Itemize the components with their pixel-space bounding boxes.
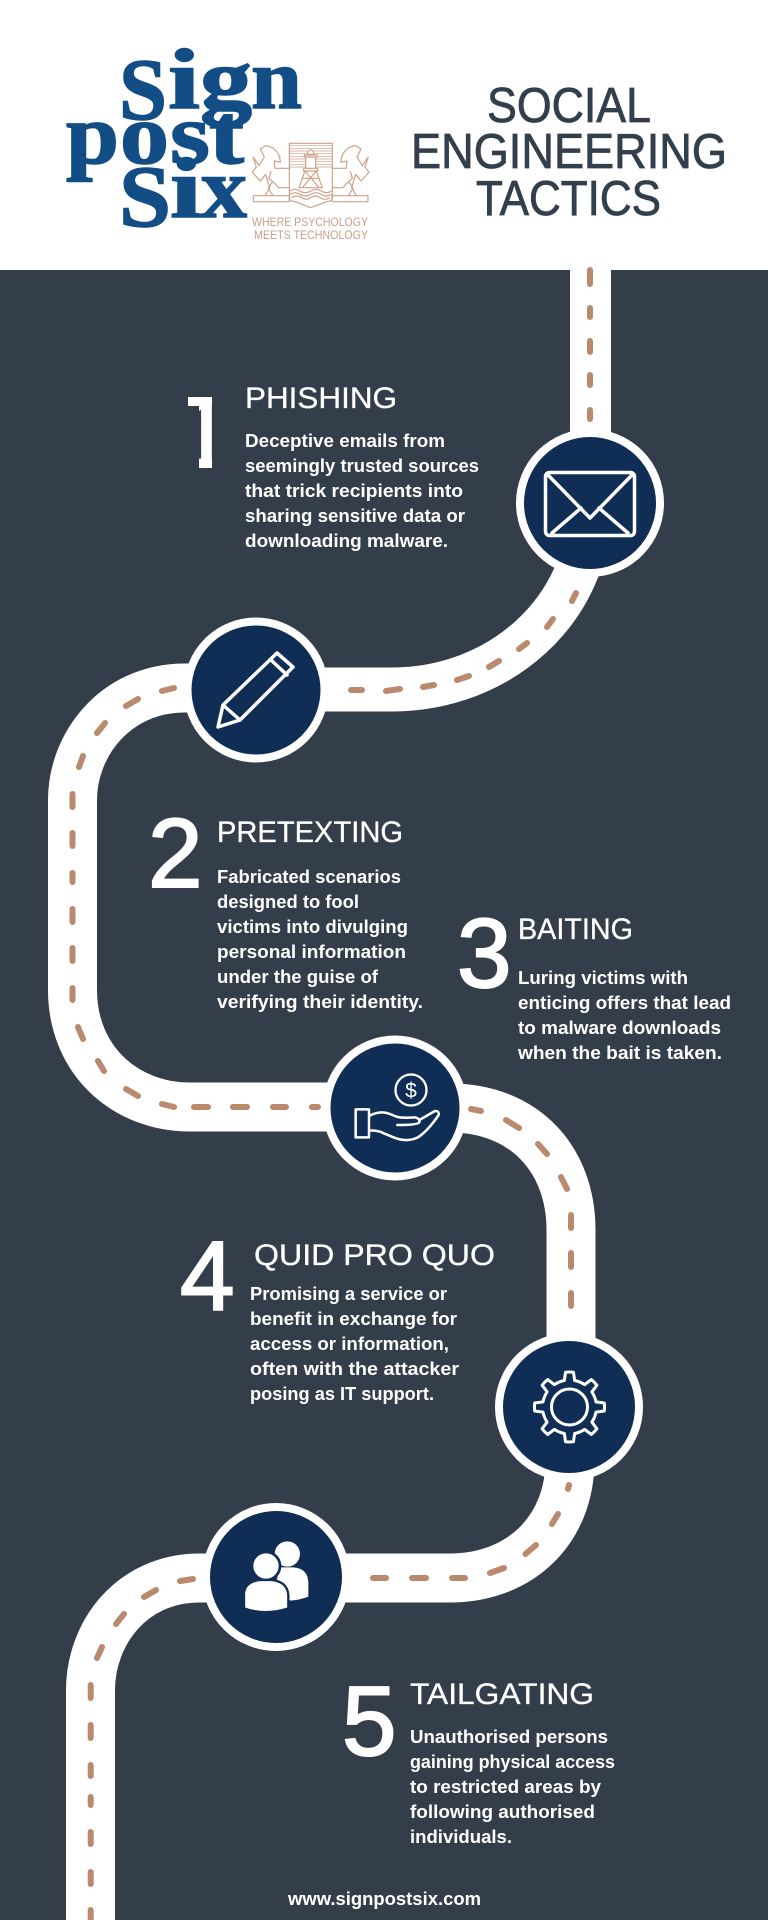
- body: pretexting: victims into divulging: [217, 916, 408, 937]
- step 4: quid pro quo: [180, 1221, 495, 1404]
- logo word Six: i: [170, 140, 202, 236]
- logo tagline: [252, 215, 368, 242]
- logo word Sign: g: [200, 31, 252, 127]
- number 1: 1: [178, 378, 232, 488]
- title: SOCIAL: [487, 79, 651, 133]
- logo word Sign: [119, 31, 302, 139]
- number 1: [188, 397, 212, 468]
- heading: pretexting: PRETEXTING: [217, 816, 403, 849]
- logo word Sign: i: [168, 31, 200, 127]
- body: quid pro quo: often with the attacker: [250, 1358, 459, 1379]
- body: pretexting: [217, 866, 423, 1012]
- title: [411, 79, 727, 226]
- logo: Signpost Six: [66, 31, 369, 246]
- icon: envelope badge: [520, 433, 660, 573]
- logo word post: s: [170, 86, 210, 182]
- heading: tailgating: TAILGATING: [410, 1678, 594, 1711]
- body: phishing: seemingly trusted sources: [245, 455, 479, 476]
- emblem: lighthouse crest: [252, 143, 369, 208]
- body: baiting: Luring victims with: [518, 967, 688, 988]
- left lion: [252, 146, 289, 202]
- body: pretexting: designed to fool: [217, 891, 359, 912]
- body: tailgating: [410, 1726, 615, 1847]
- body: quid pro quo: Promising a service or: [250, 1283, 447, 1304]
- body: phishing: [245, 430, 479, 551]
- body: baiting: when the bait is taken.: [517, 1042, 722, 1063]
- body: phishing: sharing sensitive data or: [245, 505, 465, 526]
- logo word post: [66, 86, 244, 182]
- icon: gear badge: [499, 1337, 639, 1477]
- body: pretexting: under the guise of: [217, 966, 379, 987]
- logo word post: t: [209, 86, 244, 182]
- number 2: 2: [148, 798, 203, 908]
- body: quid pro quo: access or information,: [250, 1333, 449, 1354]
- body: quid pro quo: benefit in exchange for: [250, 1308, 457, 1329]
- logo word Sign: S: [119, 42, 167, 139]
- title: ENGINEERING: [411, 125, 727, 179]
- logo word post: p: [66, 86, 119, 182]
- logo tagline: MEETS TECHNOLOGY: [254, 228, 368, 242]
- road centre dashes: [72, 270, 590, 1920]
- heading: phishing: PHISHING: [245, 382, 397, 415]
- body: quid pro quo: posing as IT support.: [250, 1383, 434, 1404]
- number 4: 4: [180, 1221, 235, 1331]
- body: tailgating: Unauthorised persons: [410, 1726, 608, 1747]
- body: tailgating: following authorised: [410, 1801, 595, 1822]
- logo word Six: [119, 140, 247, 246]
- body: pretexting: Fabricated scenarios: [217, 866, 401, 887]
- title: TACTICS: [476, 172, 661, 226]
- heading: baiting: BAITING: [518, 913, 633, 946]
- step 1: phishing: [178, 378, 479, 551]
- number 5: 5: [342, 1666, 397, 1776]
- icon: pencil badge: [188, 622, 324, 758]
- step 2: pretexting: [148, 798, 423, 1012]
- body: tailgating: individuals.: [410, 1826, 512, 1847]
- body: tailgating: to restricted areas by: [410, 1776, 602, 1797]
- icon: hand with coin badge: [326, 1040, 464, 1176]
- footer url: www.signpostsix.com: [287, 1888, 481, 1909]
- body: baiting: to malware downloads: [518, 1017, 721, 1038]
- body: quid pro quo: [250, 1283, 459, 1404]
- body: baiting: enticing offers that lead: [518, 992, 731, 1013]
- body: phishing: Deceptive emails from: [245, 430, 445, 451]
- body: pretexting: verifying their identity.: [217, 991, 423, 1012]
- body: phishing: that trick recipients into: [245, 480, 463, 501]
- winding road: [72, 270, 590, 1920]
- logo word post: o: [120, 86, 169, 182]
- number 3: 3: [457, 898, 512, 1008]
- step 3: baiting: [457, 898, 731, 1063]
- header band: [0, 0, 768, 270]
- logo word Sign: n: [251, 31, 302, 127]
- right lion: [332, 146, 369, 202]
- step 5: tailgating: [342, 1666, 615, 1847]
- body: pretexting: personal information: [217, 941, 406, 962]
- icon: hand with coin badge: $: [405, 1080, 417, 1102]
- logo tagline: WHERE PSYCHOLOGY: [252, 215, 368, 229]
- icon: people badge: [206, 1507, 346, 1647]
- heading: quid pro quo: QUID PRO QUO: [254, 1239, 495, 1272]
- logo word Six: S: [119, 149, 171, 246]
- body: phishing: downloading malware.: [245, 530, 448, 551]
- logo word Six: x: [201, 140, 247, 236]
- body: tailgating: gaining physical access: [410, 1751, 615, 1772]
- body: baiting: [517, 967, 731, 1063]
